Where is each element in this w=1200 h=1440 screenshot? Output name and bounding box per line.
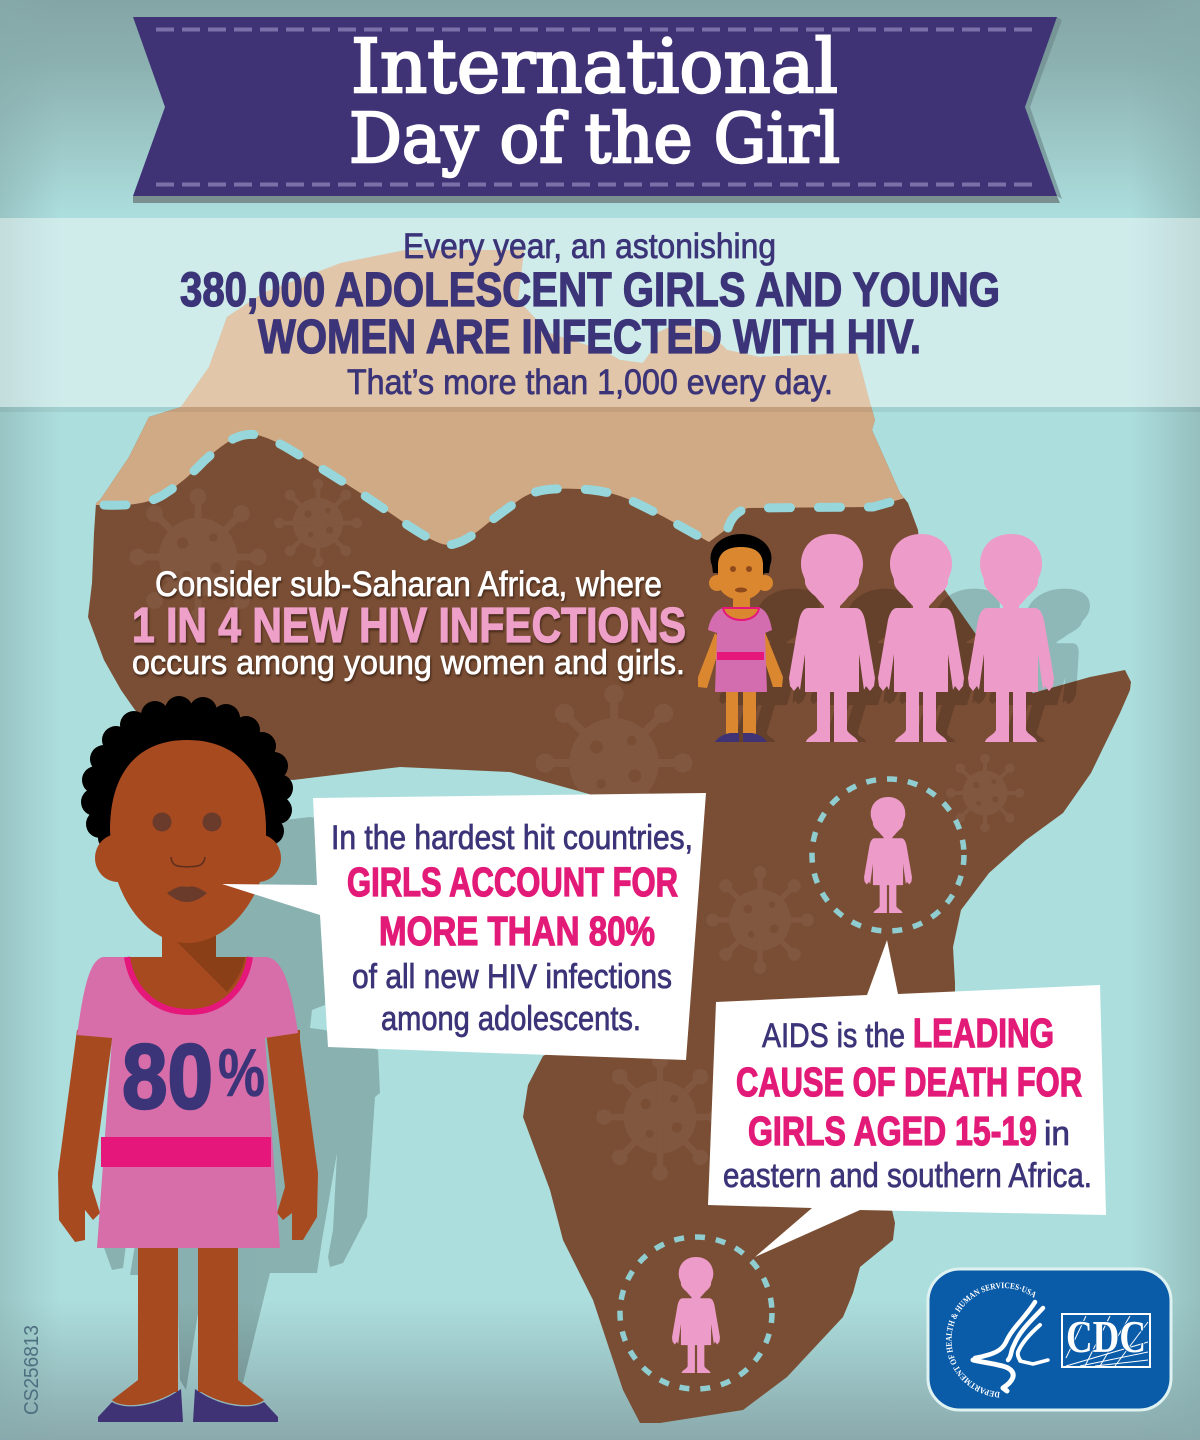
callout: leading cause of death: AIDS is the — [762, 1017, 905, 1055]
large girl: % — [218, 1035, 265, 1111]
pink girl silhouettes — [789, 534, 1054, 742]
headline text block: WOMEN ARE INFECTED WITH HIV. — [258, 311, 921, 364]
HHS seal ring text — [952, 1288, 1034, 1392]
callout: leading cause of death: LEADING — [913, 1010, 1054, 1056]
arms — [58, 1030, 318, 1242]
callout: leading cause of death: in — [1044, 1115, 1070, 1153]
large girl shadow — [103, 817, 380, 1390]
dress — [77, 957, 298, 1248]
callout: girls account for more than 80%: MORE THAN 80% — [379, 908, 655, 954]
dashed sub-Saharan boundary — [104, 434, 905, 545]
callout: leading cause of death: GIRLS AGED 15-19 — [748, 1108, 1037, 1154]
callout: girls account for more than 80% — [222, 793, 706, 1060]
callout: girls account for more than 80%: GIRLS ACCOUNT FOR — [347, 859, 678, 905]
callout: leading cause of death — [708, 940, 1106, 1257]
title text: International — [351, 24, 838, 110]
logo: HHS and CDC — [926, 1268, 1172, 1412]
small girl in colour — [698, 534, 783, 742]
belt — [101, 1137, 271, 1167]
figure shadows — [706, 589, 1108, 742]
northern Africa tan region — [96, 250, 904, 545]
banner: title: Day of the Girl — [349, 100, 840, 179]
neckline — [127, 957, 250, 1010]
80% on dress: 80 — [122, 1026, 213, 1128]
callout: leading cause of death: eastern and southern Africa. — [723, 1157, 1092, 1195]
callout: girls account for more than 80%: of all new HIV infections — [352, 958, 672, 996]
hair — [81, 696, 293, 863]
text block: sub-Saharan Africa — [132, 565, 686, 682]
eyes — [152, 812, 172, 832]
ears — [95, 834, 141, 882]
virus pattern on map — [129, 479, 1024, 1181]
text block: sub-Saharan Africa: occurs among young women and girls. — [132, 644, 685, 682]
headline text block: Every year, an astonishing — [403, 227, 776, 266]
callout: girls account for more than 80%: among adolescents. — [381, 1000, 641, 1038]
feet — [112, 1380, 264, 1405]
shoes — [98, 1389, 278, 1422]
headline text block: That’s more than 1,000 every day. — [347, 363, 833, 402]
callout: girls account for more than 80%: In the hardest hit countries, — [331, 819, 693, 857]
map: Africa — [88, 250, 1131, 1423]
large girl — [58, 696, 318, 1422]
callout: leading cause of death: CAUSE OF DEATH FOR — [736, 1059, 1082, 1105]
dashed circle with girl, east Africa — [812, 779, 964, 931]
nose — [171, 857, 205, 867]
text block: sub-Saharan Africa: 1 IN 4 NEW HIV INFECTIONS — [132, 599, 686, 653]
text block: sub-Saharan Africa: Consider sub-Saharan Africa, where — [155, 565, 662, 604]
CDC box: CDC — [1066, 1312, 1146, 1362]
neck — [162, 925, 216, 961]
legs — [138, 1240, 238, 1392]
dashed circle with girl, southern Africa — [620, 1237, 772, 1389]
mouth — [167, 886, 207, 902]
logo: HHS and CDC: DEPARTMENT OF HEALTH & HUMAN SERVICES·USA — [946, 1282, 1036, 1398]
face — [110, 740, 266, 943]
HHS eagle — [973, 1302, 1048, 1391]
banner: title — [133, 17, 1062, 203]
headline text block — [180, 227, 1000, 402]
headline text block: 380,000 ADOLESCENT GIRLS AND YOUNG — [180, 264, 1000, 317]
document code: CS256813 — [21, 1325, 43, 1415]
translucent headline band — [0, 218, 1200, 412]
